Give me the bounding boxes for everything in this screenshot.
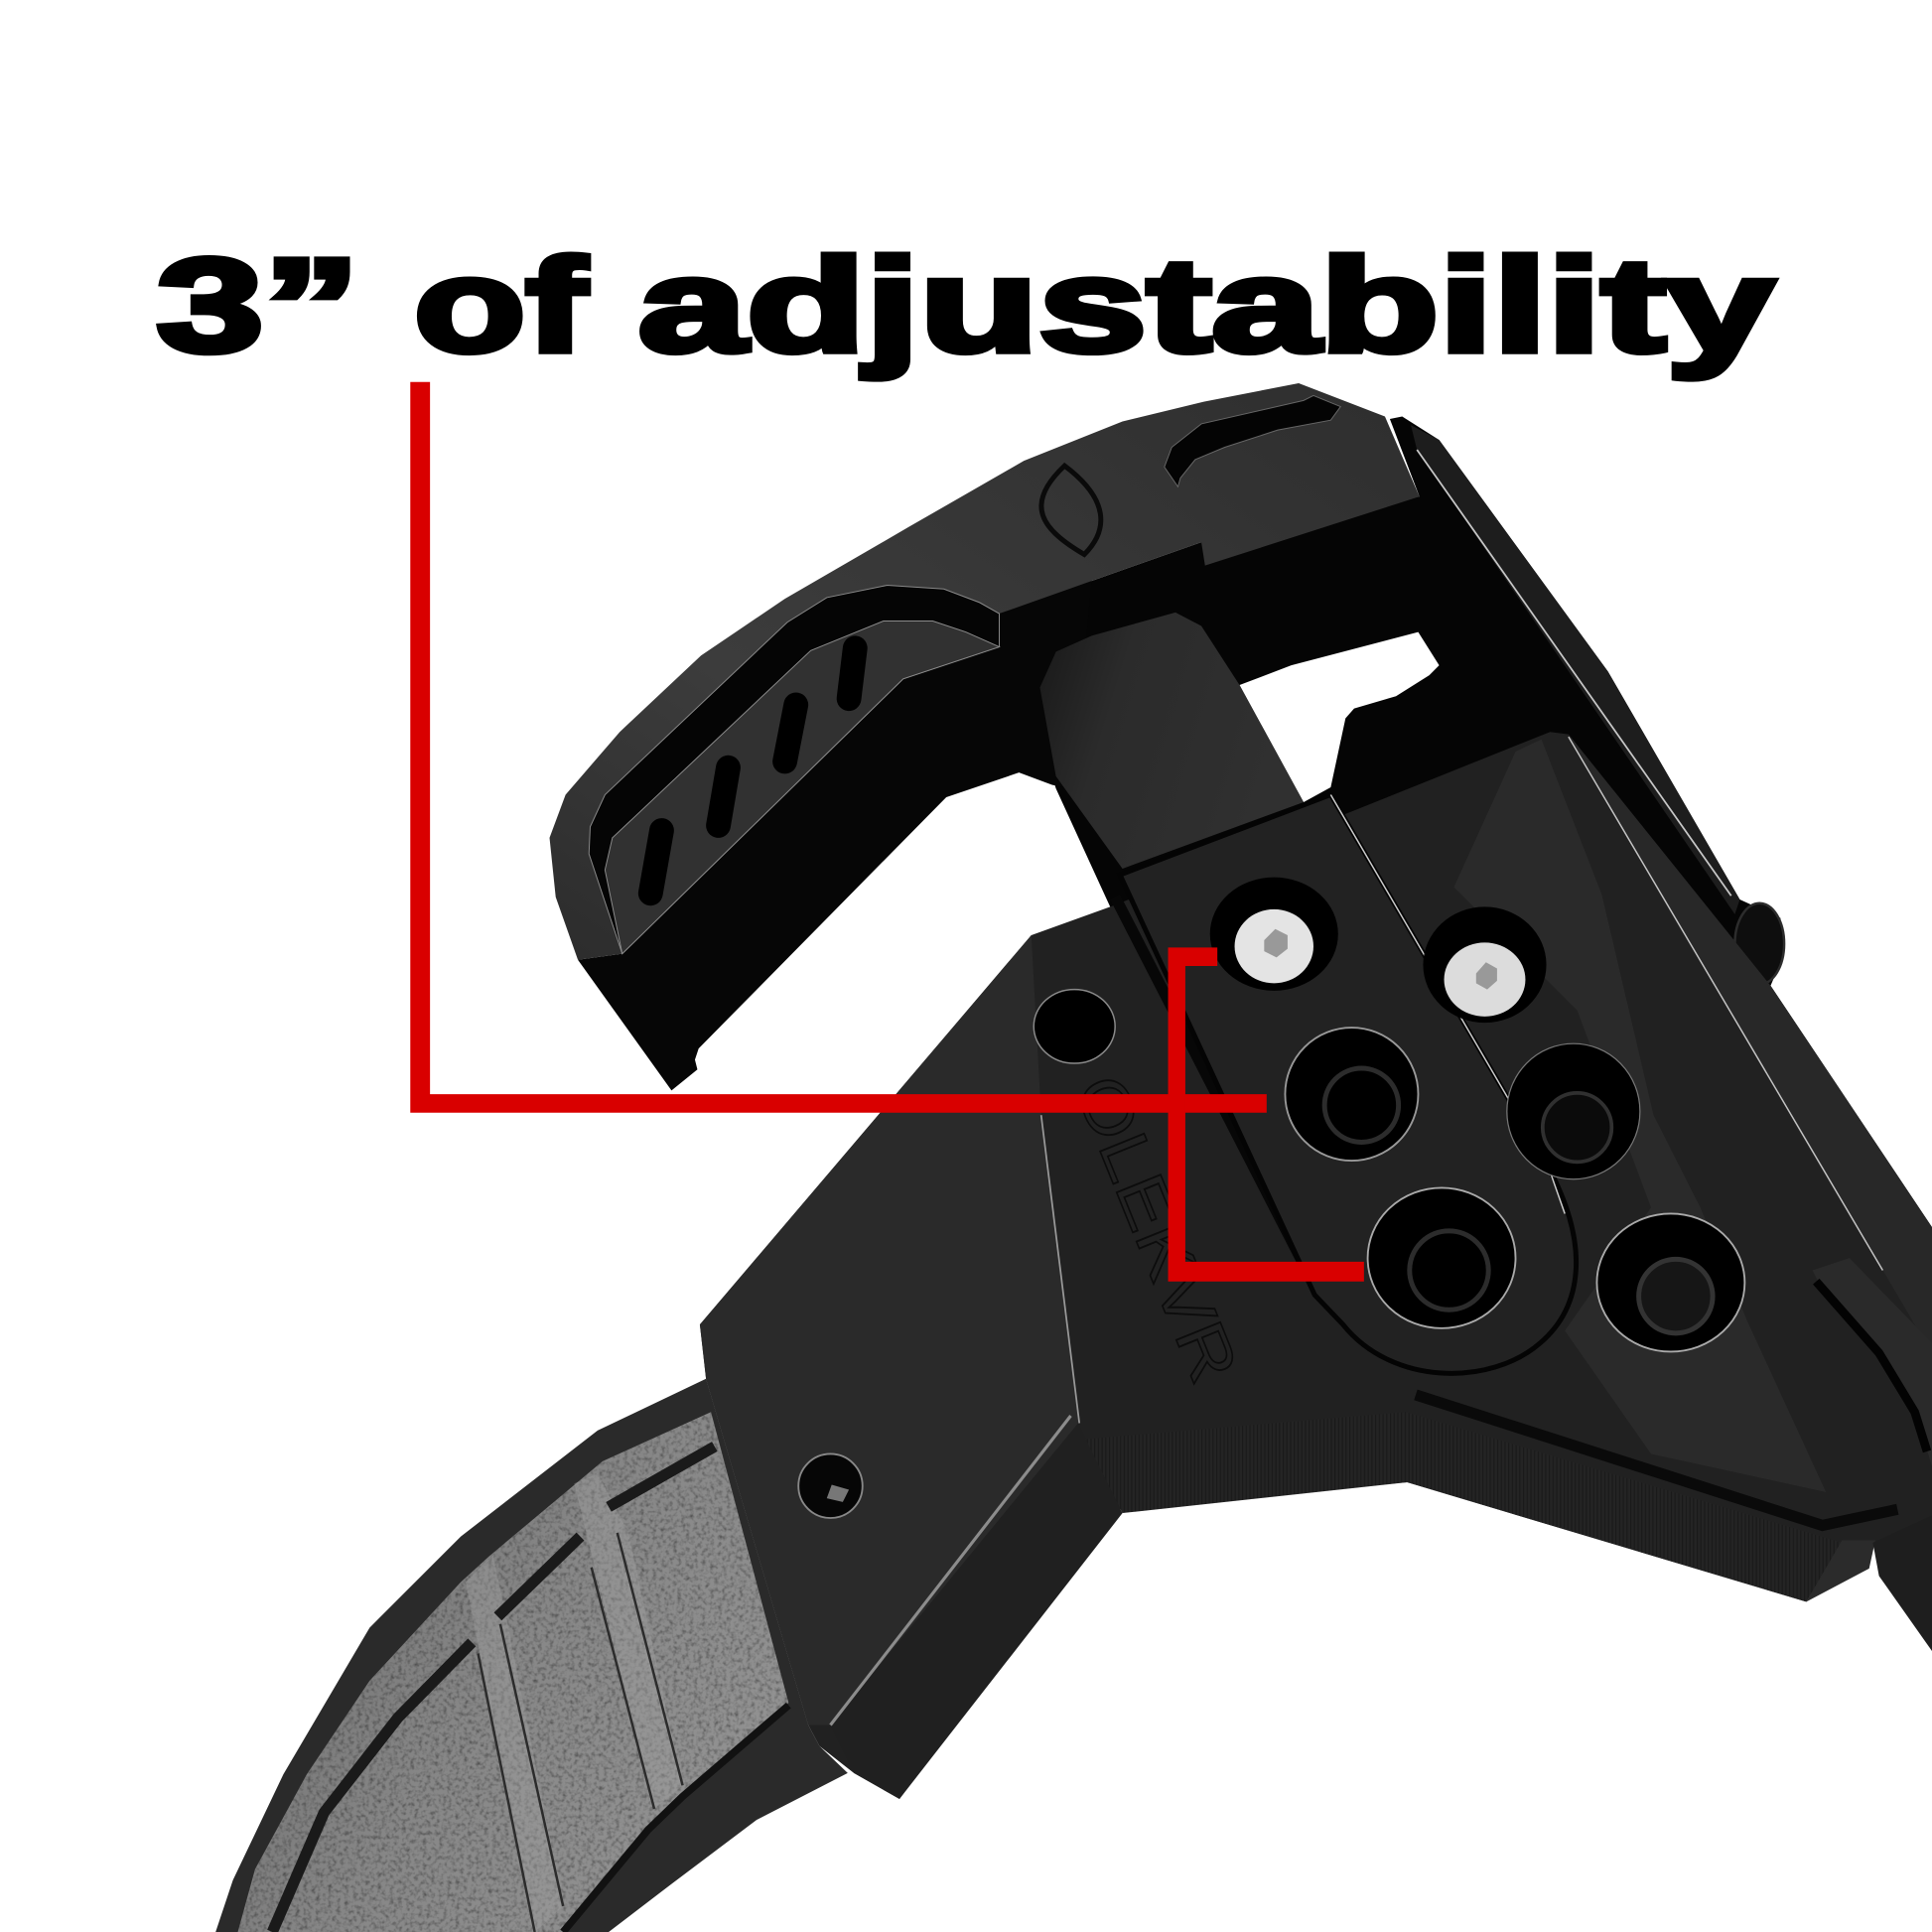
grip grooves: [272, 1447, 715, 1932]
grip ribs light bands: [466, 1473, 683, 1932]
right plate outer edge: [1569, 735, 1932, 1354]
hole: side screw: [798, 1453, 863, 1518]
grip slots: [650, 648, 855, 894]
grip dark rim: [215, 1379, 848, 1932]
hole: strap middle: [1285, 1028, 1418, 1161]
title: adjustability: [638, 232, 1774, 380]
title: 3”: [157, 232, 359, 380]
back plate highlight: [1417, 450, 1731, 896]
hole: plate middle: [1507, 1043, 1640, 1179]
main leader line: [410, 382, 1267, 1113]
logo mark: [1041, 466, 1101, 554]
grip rib lines: [479, 1533, 683, 1932]
product: curved lower grip: [215, 1379, 848, 1932]
hole: plate lower: [1596, 1213, 1744, 1351]
hole: small plate hole: [1034, 990, 1115, 1063]
tab on right: [1813, 1258, 1932, 1466]
hole: strap upper with screw: [1210, 878, 1338, 991]
handle underside: [578, 579, 1092, 1090]
finger recess: [589, 586, 1000, 954]
white window in the frame: [1240, 632, 1440, 802]
plate bottom shadow: [1416, 1395, 1897, 1525]
title: [157, 232, 1774, 380]
grip inner edge: [563, 1706, 788, 1932]
grip metal face: [238, 1412, 788, 1932]
hole: plate upper with screw: [1423, 906, 1547, 1023]
back plate end cap: [1734, 903, 1784, 985]
hole: strap lower: [1368, 1187, 1516, 1328]
top handle grey face: [550, 383, 1420, 960]
product: top handle, frame and plate: [550, 383, 1932, 1799]
rod: [1872, 1516, 1932, 1651]
band corner triangle: [1806, 1540, 1875, 1601]
left plate facet: [700, 935, 1079, 1725]
handle stem: [1039, 613, 1304, 869]
bracket to the three holes: [1169, 947, 1364, 1282]
slotted facet: [605, 621, 1000, 954]
title: of: [414, 232, 587, 380]
engraved brand text: OLEKVR: [1060, 1064, 1253, 1393]
back plate face: [1411, 425, 1739, 914]
handle top groove: [1165, 395, 1340, 486]
red callout lines: [410, 382, 1364, 1282]
chamfer below plate: [830, 1423, 1123, 1799]
dark gap along strap: [1115, 897, 1307, 1269]
tab shadow: [1816, 1282, 1927, 1451]
plate fold line: [1041, 1115, 1079, 1423]
strap highlight: [1330, 794, 1565, 1213]
right plate highlight: [1569, 737, 1882, 1271]
adjustment strap: [1120, 794, 1577, 1373]
right plate textured panel: [1453, 740, 1826, 1492]
chamfer highlight: [830, 1416, 1070, 1725]
lower plate body: [700, 732, 1932, 1799]
black frame behind handle: [1000, 416, 1932, 1543]
ridged underside band: [1085, 1412, 1842, 1601]
